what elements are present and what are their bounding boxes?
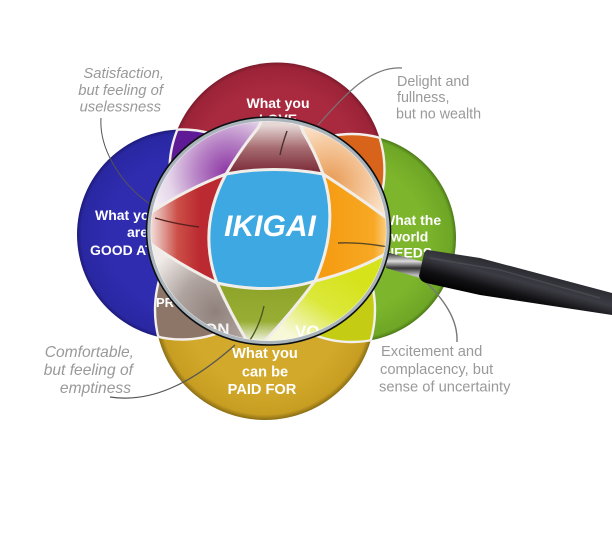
lens curve: bottom: [250, 306, 264, 340]
lens rim: [146, 117, 390, 345]
label: what you are good at: are: [127, 224, 148, 240]
lens region: purple: [154, 122, 260, 209]
annotation: delight: Delight and: [397, 74, 469, 90]
lens region: bottom petal: [220, 284, 312, 340]
magnifier handle: [386, 250, 612, 315]
annotation: satisfaction: uselessness: [80, 100, 162, 116]
label: what you can be paid for: can be: [242, 364, 288, 380]
panel: what you are good at circle: [77, 130, 287, 340]
overlap: lime: [320, 292, 374, 341]
lens region: left petal: [150, 176, 223, 280]
annotation: comfortable: Comfortable,: [45, 344, 134, 361]
label: what you love: LOVE: [259, 111, 297, 127]
lens region: top petal: [229, 121, 321, 172]
lens region: grey brown: [152, 247, 244, 338]
label: profession fragment: PR: [156, 295, 175, 310]
lens curve: top: [280, 131, 287, 155]
lens region: lime: [267, 257, 384, 341]
label: what you can be paid for: PAID FOR: [228, 382, 297, 398]
lens label: vocation fragment: VO: [295, 322, 320, 341]
arrow: satisfaction curve: [101, 118, 150, 204]
annotation: satisfaction: Satisfaction,: [83, 66, 164, 82]
ikigai infographic: [44, 62, 612, 420]
lens label: profession fragment: ON: [204, 320, 230, 339]
overlap: grey brown: [156, 284, 213, 338]
label: what the world needs: world: [390, 228, 428, 244]
label: what you are good at: What you: [95, 207, 158, 223]
white outlines of overlaps: [154, 128, 386, 344]
annotation: satisfaction: but feeling of: [78, 83, 165, 99]
label: what the world needs: NEEDS: [384, 244, 432, 260]
magnifier lens: [140, 110, 400, 345]
arrow: comfortable curve: [110, 345, 235, 398]
label: what you are good at: GOOD AT: [90, 242, 154, 258]
label: what you love: What you: [246, 95, 310, 111]
lens curve: left: [155, 218, 199, 227]
annotation: excitement: complacency, but: [380, 362, 493, 378]
annotation: comfortable: but feeling of: [44, 362, 135, 379]
lens curve: right: [338, 243, 388, 247]
panel: what you can be paid for circle: [155, 200, 375, 420]
overlap: orange: [338, 135, 384, 187]
annotation: excitement: Excitement and: [381, 344, 482, 360]
label: what you can be paid for: What you: [232, 346, 298, 362]
overlap: purple: [171, 130, 204, 161]
arrow: excitement curve: [422, 278, 457, 342]
annotation: delight: but no wealth: [396, 106, 481, 122]
lens region: peach: [302, 126, 385, 215]
panel: what you love circle: [170, 62, 384, 278]
annotation: excitement: sense of uncertainty: [379, 380, 511, 396]
arrow: delight curve: [318, 68, 402, 125]
annotation: comfortable: emptiness: [60, 380, 131, 397]
lens region: centre ikigai: [208, 170, 330, 289]
panel: what the world needs circle: [248, 134, 456, 342]
label: what the world needs: What the: [382, 212, 441, 228]
annotation: delight: fullness,: [397, 90, 449, 106]
lens region: right petal: [318, 178, 386, 279]
lens white lines: [146, 116, 392, 343]
ikigai title: IKIGAI: [224, 210, 316, 243]
